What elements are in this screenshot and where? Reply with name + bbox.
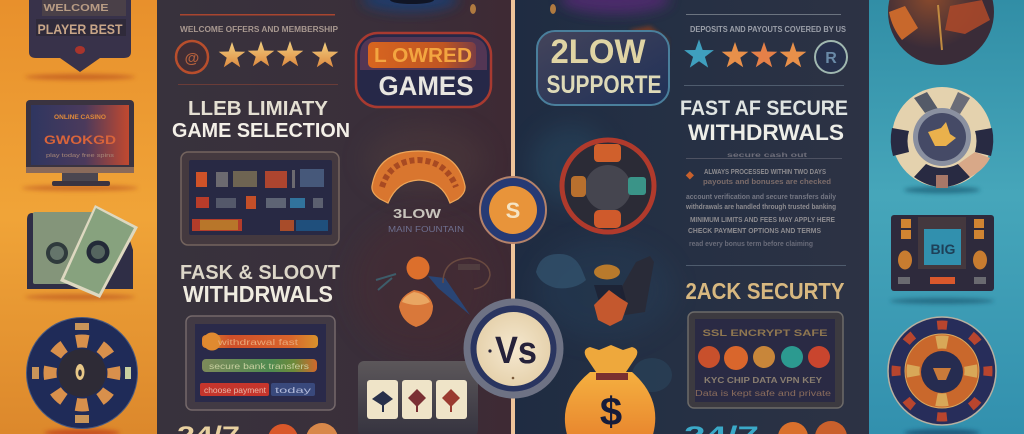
panel: withdrawal tablet bbox=[186, 316, 335, 410]
text block: body copy right: ◆ bbox=[685, 170, 694, 181]
icon: desktop monitor: GWOKGD bbox=[44, 133, 116, 147]
icon: dice group bbox=[376, 256, 490, 327]
text block: body copy right: secure cash out bbox=[727, 153, 807, 159]
icon: desktop monitor: ONLINE CASINO bbox=[54, 115, 106, 121]
heading: limited game selection: GAME SELECTION bbox=[172, 120, 350, 142]
icon: masks and thief bbox=[536, 254, 672, 392]
badge: games: L OWRED bbox=[374, 45, 472, 67]
icon: top gaming device: WELCOME bbox=[44, 3, 109, 14]
icon: money bag bbox=[565, 345, 655, 434]
icon: top gaming device: PLAYER BEST bbox=[38, 21, 123, 37]
heading: 24/7 security: 2ACK SECURTY bbox=[686, 278, 844, 304]
rating stars and icon right bbox=[684, 39, 847, 73]
badge: versus: Vs bbox=[495, 330, 537, 372]
rating icon and stars: @ bbox=[185, 50, 199, 67]
heading: fast withdrawals bbox=[180, 262, 340, 307]
panel: security tablet: KYC CHIP DATA VPN KEY bbox=[704, 376, 823, 385]
icon: slot machine: BIG bbox=[931, 241, 956, 257]
rating stars and icon right: R bbox=[825, 50, 837, 67]
panel: withdrawal tablet: choose payment bbox=[204, 386, 267, 395]
heading: fast withdrawals: WITHDRWALS bbox=[183, 281, 333, 307]
panel: withdrawal tablet: withdrawal fast bbox=[216, 338, 299, 347]
heading: limited game selection bbox=[172, 98, 350, 142]
label: 24/7 and chips right bbox=[684, 421, 847, 434]
text block: body copy right: ALWAYS PROCESSED WITHIN TWO DAYS bbox=[704, 169, 826, 176]
text block: body copy right: account verification and secure transfers daily bbox=[686, 194, 836, 201]
icon: roulette wheel right bbox=[888, 317, 996, 434]
icon: cash banknotes bbox=[25, 205, 138, 300]
icon: roulette wheel left bbox=[26, 318, 138, 434]
rating subtitle right: DEPOSITS AND PAYOUTS COVERED BY US bbox=[690, 25, 847, 34]
badge: low support: SUPPORTE bbox=[546, 71, 662, 99]
text block: body copy right: withdrawals are handled through trusted banking bbox=[685, 204, 836, 211]
heading: fast withdrawals: FASK & SLOOVT bbox=[180, 262, 340, 284]
badge: low support: 2LOW bbox=[550, 33, 646, 71]
text block: body copy right: MINIMUM LIMITS AND FEES MAY APPLY HERE bbox=[690, 217, 835, 224]
center divider bbox=[511, 0, 515, 434]
panel: security tablet bbox=[688, 312, 843, 408]
text block: body copy right: payouts and bonuses are checked bbox=[703, 179, 831, 186]
panel: right blue sidebar bbox=[869, 0, 1024, 434]
panel: security tablet: SSL ENCRYPT SAFE bbox=[702, 328, 828, 338]
icon: desktop monitor: play today free spins bbox=[46, 153, 115, 159]
icon: casino chip bbox=[891, 87, 993, 194]
panel: left orange sidebar bbox=[0, 0, 157, 434]
icon: top gaming device bbox=[25, 0, 135, 80]
heading: fast and secure withdrawals bbox=[680, 97, 848, 145]
heading: fast and secure withdrawals: FAST AF SECURE bbox=[680, 97, 848, 120]
icon: orange arch emblem: MAIN FOUNTAIN bbox=[388, 225, 464, 234]
icon: top treasure orb bbox=[888, 0, 994, 65]
heading: fast and secure withdrawals: WITHDRWALS bbox=[688, 120, 844, 145]
panel: withdrawal tablet: secure bank transfers bbox=[209, 362, 309, 371]
panel: game tablet bbox=[181, 152, 339, 245]
icon: spinner with red ring bbox=[562, 140, 654, 232]
panel: left dark comparison column bbox=[157, 0, 511, 434]
badge: games bbox=[356, 33, 491, 107]
icon: slot machine bbox=[890, 215, 994, 304]
heading: limited game selection: LLEB LIMIATY bbox=[188, 98, 329, 120]
badge: versus bbox=[464, 298, 564, 398]
panel: right dark comparison column bbox=[515, 0, 869, 434]
icon: money bag: $ bbox=[600, 390, 622, 434]
text block: body copy right: read every bonus term before claiming bbox=[689, 241, 813, 248]
icon: desktop monitor bbox=[22, 100, 138, 191]
badge: games: GAMES bbox=[378, 71, 474, 101]
text block: body copy right bbox=[685, 153, 836, 248]
panel: withdrawal tablet: today bbox=[275, 386, 311, 395]
badge: low support bbox=[537, 26, 669, 105]
text block: body copy right: CHECK PAYMENT OPTIONS AND TERMS bbox=[688, 228, 821, 235]
icon: orange arch emblem bbox=[372, 151, 465, 234]
icon: S coin: S bbox=[506, 198, 520, 223]
rating subtitle: WELCOME OFFERS AND MEMBERSHIP bbox=[180, 25, 339, 34]
panel: security tablet: Data is kept safe and private bbox=[695, 389, 832, 398]
icon: orange arch emblem: 3LOW bbox=[393, 206, 442, 221]
icon: S coin bbox=[480, 177, 546, 243]
rating icon and stars bbox=[176, 41, 338, 73]
label: 24/7 and chips left bbox=[177, 422, 338, 434]
icon: card tray bbox=[358, 361, 478, 434]
